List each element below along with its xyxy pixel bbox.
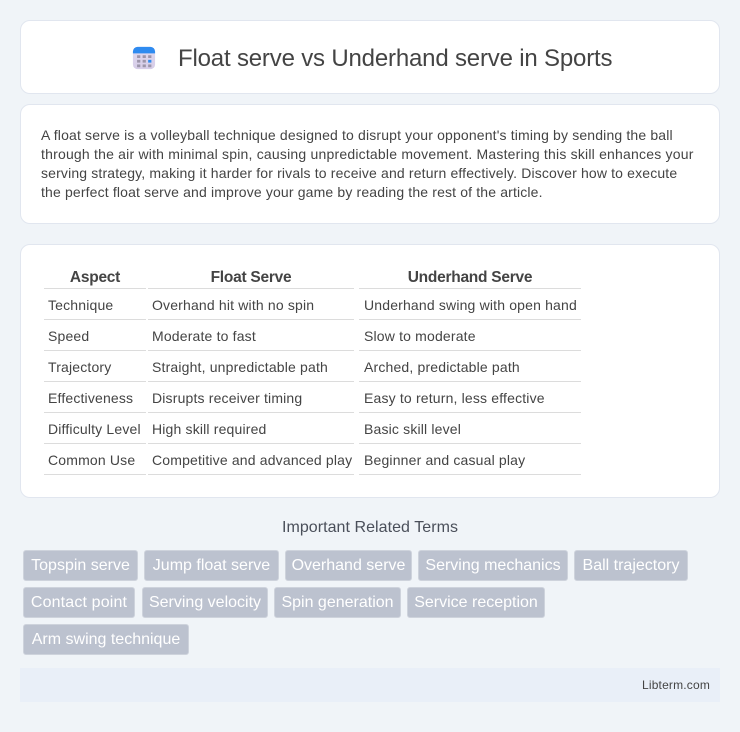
- tag: Arm swing technique: [32, 631, 180, 648]
- tag list: [23, 550, 688, 655]
- tag: [144, 550, 279, 581]
- tag: Contact point: [31, 594, 127, 611]
- table header: Float Serve: [211, 269, 291, 286]
- panel: comparison table: [20, 244, 720, 498]
- tag: Serving velocity: [149, 594, 261, 611]
- row: technique: Overhand hit with no spin: [152, 297, 314, 313]
- text block: intro: [41, 127, 694, 200]
- row: trajectory: [44, 359, 581, 382]
- row: technique: Technique: [48, 297, 113, 313]
- tag: Serving mechanics: [425, 557, 561, 574]
- tag: Overhand serve: [292, 557, 405, 574]
- row: effectiveness: Easy to return, less effective: [364, 390, 545, 406]
- row: speed: Slow to moderate: [364, 328, 476, 344]
- row: trajectory: Straight, unpredictable path: [152, 359, 328, 375]
- row: trajectory: Arched, predictable path: [364, 359, 520, 375]
- tag: [285, 550, 412, 581]
- panel: header: [20, 20, 720, 94]
- icon: calendar: [132, 46, 156, 70]
- row: difficulty level: Basic skill level: [364, 421, 461, 437]
- row: common use: Beginner and casual play: [364, 452, 525, 468]
- heading: related terms: Important Related Terms: [282, 519, 458, 536]
- row: effectiveness: Disrupts receiver timing: [152, 390, 302, 406]
- row: difficulty level: High skill required: [152, 421, 266, 437]
- row: common use: Common Use: [48, 452, 135, 468]
- row: speed: Speed: [48, 328, 89, 344]
- row: common use: [44, 452, 581, 475]
- row: effectiveness: [44, 390, 581, 413]
- row: effectiveness: Effectiveness: [48, 390, 133, 406]
- row: speed: [44, 328, 581, 351]
- tag: [407, 587, 545, 618]
- tag: Topspin serve: [31, 557, 130, 574]
- row: difficulty level: [44, 421, 581, 444]
- tag: [574, 550, 688, 581]
- text block: intro: A float serve is a volleyball technique designed to disrupt your opponent's timing by sending the ball: [41, 127, 673, 143]
- text block: intro: through the air with minimal spin, causing unpredictable movement. Mastering this skill enhances your: [41, 146, 694, 162]
- row: common use: Competitive and advanced play: [152, 452, 352, 468]
- tag: [142, 587, 268, 618]
- tag: Ball trajectory: [583, 557, 679, 574]
- footer bar: [20, 668, 720, 702]
- row: technique: Underhand swing with open hand: [364, 297, 577, 313]
- tag: Jump float serve: [153, 557, 270, 574]
- tag: [23, 550, 138, 581]
- table header: [44, 269, 581, 289]
- footer credit: Libterm.com: [642, 678, 710, 692]
- table header: Underhand Serve: [408, 269, 532, 286]
- panel: description: [20, 104, 720, 224]
- row: trajectory: Trajectory: [48, 359, 111, 375]
- title: Float serve vs Underhand serve in Sports: [178, 45, 612, 72]
- row: speed: Moderate to fast: [152, 328, 256, 344]
- tag: [23, 587, 135, 618]
- tag: [274, 587, 401, 618]
- table header: Aspect: [70, 269, 120, 286]
- tag: Spin generation: [281, 594, 394, 611]
- row: difficulty level: Difficulty Level: [48, 421, 141, 437]
- tag: Service reception: [414, 594, 538, 611]
- tag: [418, 550, 568, 581]
- tag: [23, 624, 189, 655]
- text block: intro: serving strategy, making it harder for rivals to receive and return effectively. Discover how to execute: [41, 165, 677, 181]
- text block: intro: the perfect float serve and improve your game by reading the rest of the article.: [41, 184, 543, 200]
- row: technique: [44, 297, 581, 320]
